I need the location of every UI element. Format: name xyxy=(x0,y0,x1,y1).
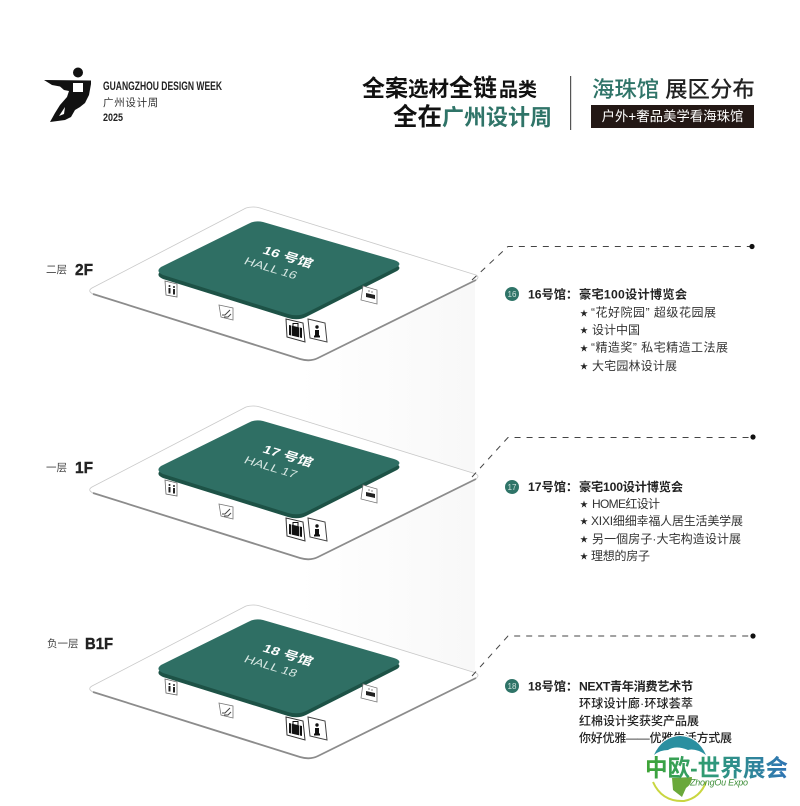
floor B1F plan xyxy=(90,605,478,758)
panel: hall 16 list: ★ xyxy=(580,362,588,371)
icon: information xyxy=(308,518,327,541)
panel: hall 17 list: ★ xyxy=(580,500,588,509)
hall 17 block: 17 号馆 xyxy=(260,442,316,469)
hall 16 block xyxy=(158,221,399,319)
hall 18 block xyxy=(158,619,399,717)
leader line B1F xyxy=(472,633,756,676)
watermark name: 中欧-世界展会 xyxy=(645,755,788,781)
panel: hall 16 list: 豪宅100设计博览会 xyxy=(579,286,687,302)
floor label 1F xyxy=(46,460,93,477)
logo text: 广州设计周 xyxy=(103,96,159,109)
panel: hall 17 list: 另一個房子·大宅构造设计展 xyxy=(592,531,741,546)
panel: hall 16 list: ★ xyxy=(580,326,588,335)
icon: information xyxy=(308,717,327,740)
panel: hall 17 list: 17号馆： xyxy=(528,479,578,494)
slogan xyxy=(362,75,552,131)
slogan: 全在广州设计周 xyxy=(393,103,552,131)
title: 海珠馆 展区分布: 海珠馆 展区分布 xyxy=(592,77,755,102)
leader line 2F xyxy=(472,244,755,280)
floor plate xyxy=(90,207,478,360)
panel: hall 17 list: XIXI细细幸福人居生活美学展 xyxy=(591,513,743,528)
panel: hall 16 list: 16号馆： xyxy=(528,286,578,302)
icon: luggage xyxy=(286,319,305,342)
hall 17 block: HALL 17 xyxy=(242,453,300,481)
panel: hall 16 list: “精造奖” 私宅精造工法展 xyxy=(591,340,728,354)
slogan: 全案选材全链品类 xyxy=(362,75,537,102)
panel: hall 17 list: 理想的房子 xyxy=(591,548,650,563)
panel: hall 18 list: 你好优雅——优雅生活方式展 xyxy=(579,730,732,745)
icon: escalator xyxy=(219,703,233,718)
subtitle badge: 户外+奢品美学看海珠馆 xyxy=(602,108,743,124)
floor label 1F: 1F xyxy=(75,460,93,477)
hall 16 badge xyxy=(505,287,519,301)
icon: cafe xyxy=(361,286,377,304)
icon: escalator xyxy=(219,305,233,320)
hall 17 block xyxy=(158,420,399,518)
panel: hall 17 list: ★ xyxy=(580,517,588,526)
watermark globe xyxy=(652,735,707,801)
icon: luggage xyxy=(286,717,305,740)
icon: restroom xyxy=(165,281,177,297)
panel: hall 16 list: 大宅园林设计展 xyxy=(592,358,677,373)
panel: hall 17 list: ★ xyxy=(580,552,588,561)
logo text: 2025 xyxy=(103,112,123,124)
floor label 2F: 2F xyxy=(75,262,93,279)
logo text: GUANGZHOU DESIGN WEEK xyxy=(103,79,222,93)
floor label B1F: B1F xyxy=(85,636,113,653)
panel: hall 16 list: “花好院园” 超级花园展 xyxy=(591,304,716,320)
panel: hall 18 list: 环球设计廊·环球荟萃 xyxy=(579,696,693,710)
hall 18 block: 18 号馆 xyxy=(260,641,316,668)
subtitle badge xyxy=(591,105,754,128)
panel: hall 18 list xyxy=(505,678,732,745)
floor 1F plan xyxy=(90,406,478,559)
floor 2F plan xyxy=(90,207,478,360)
panel: hall 17 list: ★ xyxy=(580,535,588,544)
hall 17 badge: 17 xyxy=(508,483,517,492)
floor label 1F: 一层 xyxy=(46,462,67,474)
floor plate xyxy=(90,605,478,758)
logo text xyxy=(103,79,222,124)
panel: hall 17 list: HOME红设计 xyxy=(592,496,660,511)
hall 16 block: HALL 16 xyxy=(242,254,300,282)
hall 18 badge xyxy=(505,679,519,693)
panel: hall 16 list xyxy=(505,286,728,373)
icon: restroom xyxy=(165,480,177,496)
header divider xyxy=(570,76,571,130)
panel: hall 16 list: ★ xyxy=(580,309,588,318)
panel: hall 17 list: 豪宅100设计博览会 xyxy=(579,479,683,494)
hall 16 badge: 16 xyxy=(508,290,517,299)
panel: hall 18 list: 红棉设计奖获奖产品展 xyxy=(579,713,699,728)
floor label B1F: 负一层 xyxy=(47,637,78,650)
icon: restroom xyxy=(165,679,177,695)
hall 18 badge: 18 xyxy=(508,682,517,691)
icon: information xyxy=(308,319,327,342)
panel: hall 17 list xyxy=(505,479,743,563)
hall 16 block: 16 号馆 xyxy=(260,243,316,270)
floor label B1F xyxy=(47,636,113,653)
panel: hall 16 list: 设计中国 xyxy=(592,322,640,337)
panel: hall 18 list: NEXT青年消费艺术节 xyxy=(579,678,693,694)
hall 17 badge xyxy=(505,480,519,494)
icon: luggage xyxy=(286,518,305,541)
floor label 2F: 二层 xyxy=(46,264,67,276)
icon: escalator xyxy=(219,504,233,519)
leader line 1F xyxy=(472,434,756,477)
watermark latin: ZhongOu Expo xyxy=(689,778,748,788)
header logo xyxy=(44,68,91,122)
hall 18 block: HALL 18 xyxy=(242,652,300,680)
panel: hall 16 list: ★ xyxy=(580,344,588,353)
floor label 2F xyxy=(46,262,93,279)
icon: cafe xyxy=(361,684,377,702)
icon: cafe xyxy=(361,485,377,503)
floor plate xyxy=(90,406,478,559)
panel: hall 18 list: 18号馆： xyxy=(528,678,578,694)
watermark xyxy=(645,735,788,801)
